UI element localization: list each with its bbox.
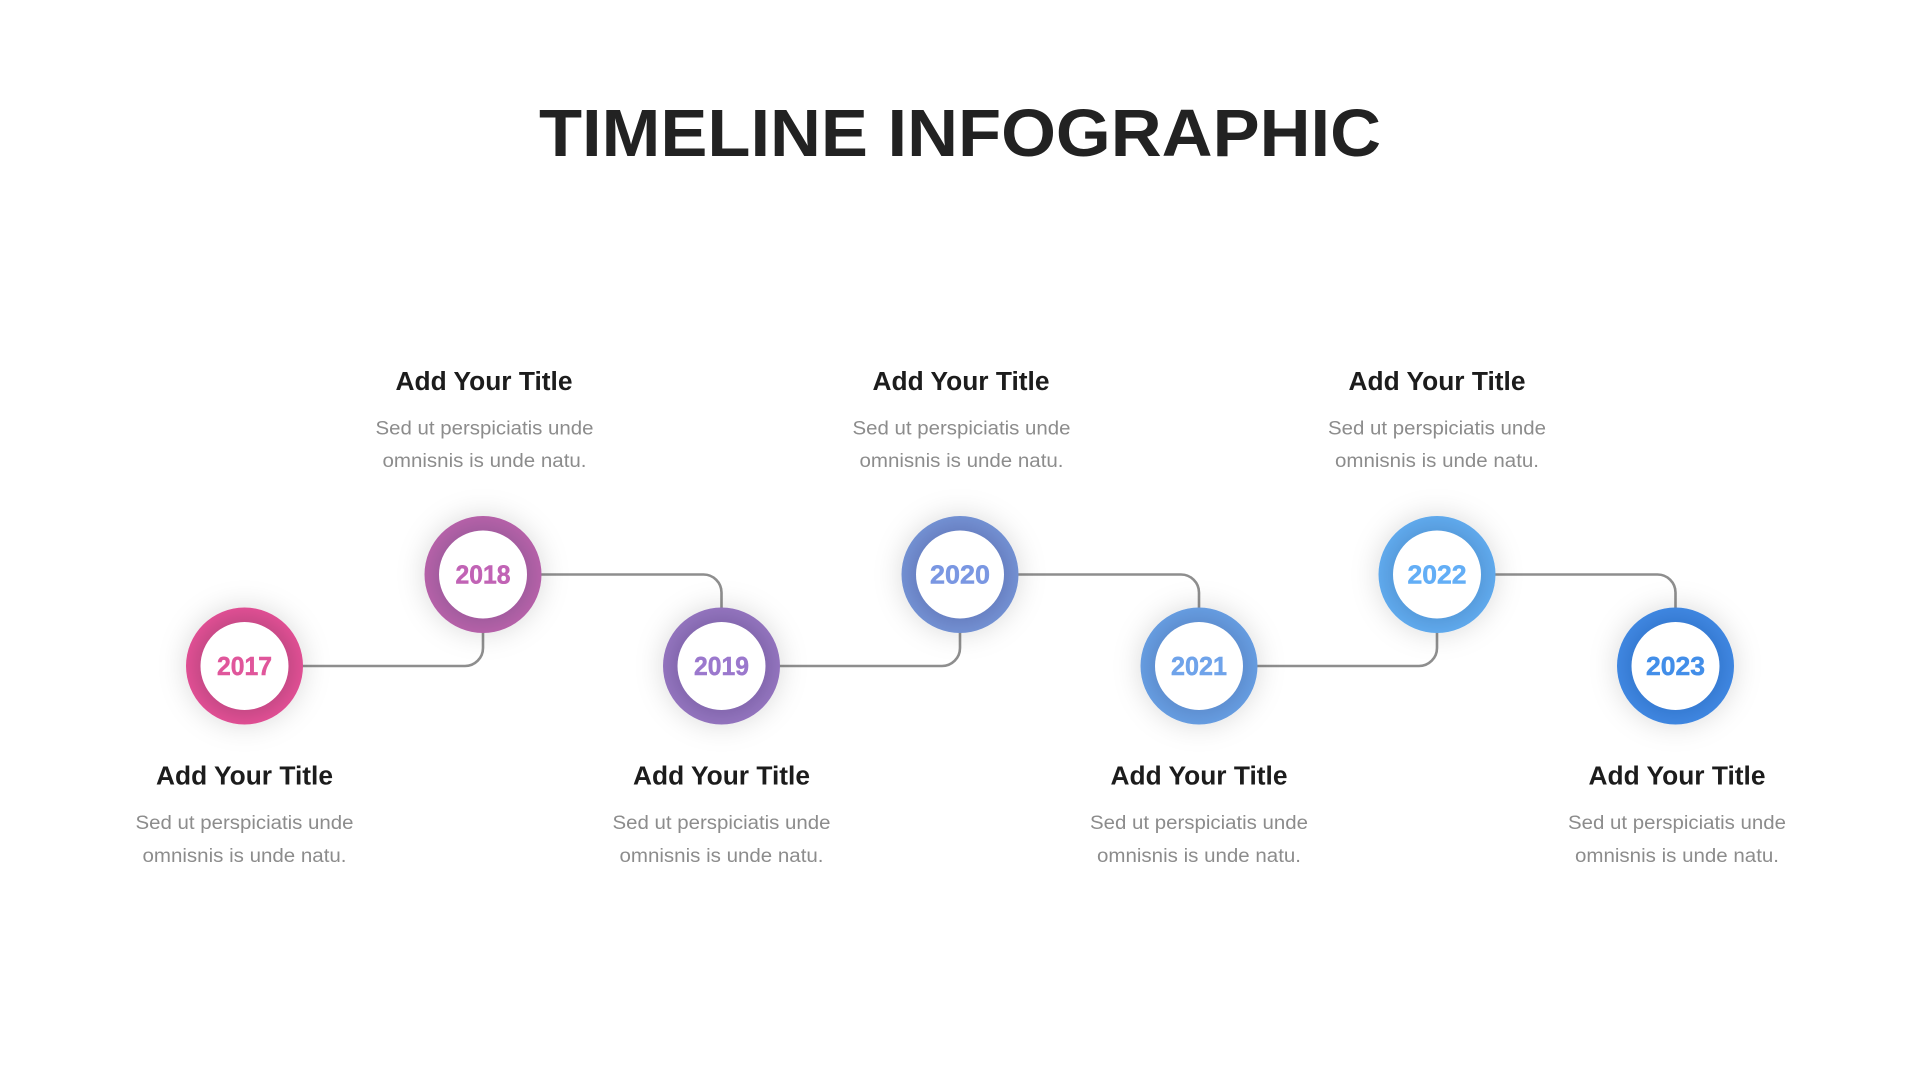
heading 2023: Add Your Title xyxy=(1588,762,1766,790)
ring 2022 xyxy=(1378,516,1496,633)
description 2020: Sed ut perspiciatis unde xyxy=(852,418,1070,440)
description 2023: omnisnis is unde natu. xyxy=(1575,846,1779,867)
heading 2020: Add Your Title xyxy=(872,368,1050,396)
description 2023 xyxy=(1568,813,1786,867)
description 2017: Sed ut perspiciatis unde xyxy=(136,813,354,834)
connector: 2021 to 2022 xyxy=(1257,630,1437,666)
ring 2023 xyxy=(1617,608,1734,724)
year 2023: 2023 xyxy=(1646,653,1705,681)
milestone 2020 xyxy=(852,368,1070,633)
heading 2019: Add Your Title xyxy=(633,762,810,790)
year 2017: 2017 xyxy=(217,653,272,681)
connector: 2019 to 2020 xyxy=(778,630,960,666)
description 2022: omnisnis is unde natu. xyxy=(1335,451,1539,472)
milestone 2019 xyxy=(612,608,830,867)
description 2021: Sed ut perspiciatis unde xyxy=(1090,813,1308,834)
year 2020: 2020 xyxy=(930,562,990,590)
connector: 2022 to 2023 xyxy=(1495,574,1676,610)
heading 2021: Add Your Title xyxy=(1110,762,1288,790)
description 2021: omnisnis is unde natu. xyxy=(1097,846,1301,867)
description 2018 xyxy=(376,418,594,472)
description 2017 xyxy=(136,813,354,867)
heading 2022: Add Your Title xyxy=(1348,368,1526,396)
description 2019 xyxy=(612,813,830,867)
description 2018: Sed ut perspiciatis unde xyxy=(376,418,594,440)
connector: 2020 to 2021 xyxy=(1018,574,1199,610)
ring 2017 xyxy=(186,608,303,724)
description 2018: omnisnis is unde natu. xyxy=(382,451,586,472)
connector: 2017 to 2018 xyxy=(300,630,483,666)
connectors xyxy=(300,574,1676,666)
year 2018: 2018 xyxy=(456,562,510,590)
heading 2017: Add Your Title xyxy=(156,762,333,790)
description 2020 xyxy=(852,418,1070,472)
description 2020: omnisnis is unde natu. xyxy=(860,451,1064,472)
milestone 2021 xyxy=(1090,608,1308,867)
ring 2021 xyxy=(1140,608,1258,724)
description 2017: omnisnis is unde natu. xyxy=(142,846,346,867)
year 2021: 2021 xyxy=(1171,653,1227,681)
ring 2019 xyxy=(663,608,780,724)
description 2019: omnisnis is unde natu. xyxy=(620,846,824,867)
year 2019: 2019 xyxy=(694,653,749,681)
description 2019: Sed ut perspiciatis unde xyxy=(612,813,830,834)
milestone 2023 xyxy=(1568,608,1786,867)
description 2022: Sed ut perspiciatis unde xyxy=(1328,418,1546,440)
description 2021 xyxy=(1090,813,1308,867)
milestone 2018 xyxy=(376,368,594,633)
description 2022 xyxy=(1328,418,1546,472)
year 2022: 2022 xyxy=(1408,562,1466,590)
description 2023: Sed ut perspiciatis unde xyxy=(1568,813,1786,834)
milestone 2022 xyxy=(1328,368,1546,633)
milestone 2017 xyxy=(136,608,354,867)
ring 2020 xyxy=(902,516,1018,633)
heading 2018: Add Your Title xyxy=(396,368,572,396)
connector: 2018 to 2019 xyxy=(540,574,722,610)
title: TIMELINE INFOGRAPHIC xyxy=(539,96,1381,171)
ring 2018 xyxy=(424,516,542,633)
